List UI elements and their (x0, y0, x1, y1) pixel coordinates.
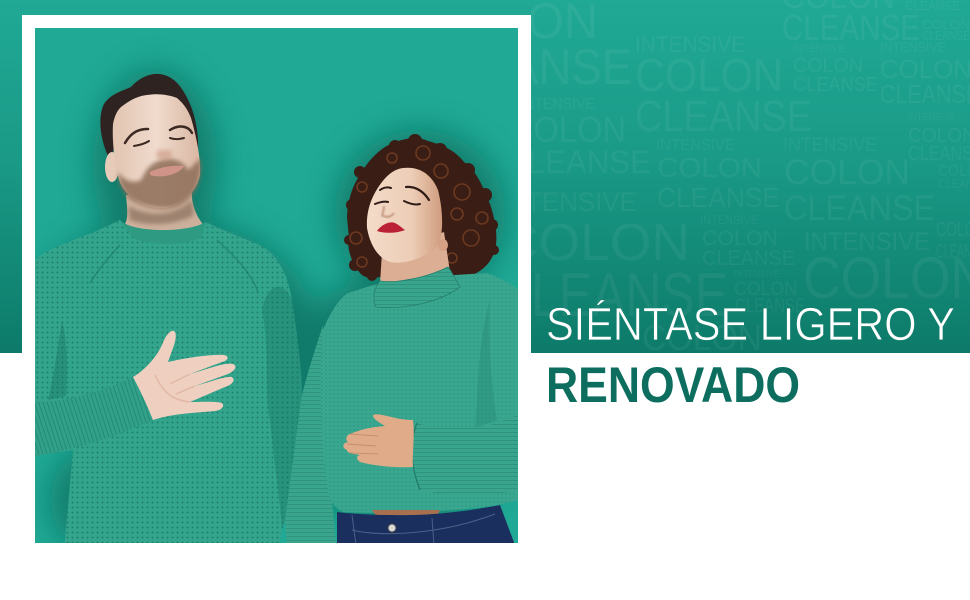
background word pattern: intensive colon cleanse: CLEANSE (420, 39, 632, 95)
woman jeans (337, 505, 515, 545)
woman ear (438, 239, 448, 251)
woman finger lines (347, 434, 378, 454)
man nose shadow (156, 150, 172, 160)
woman hand (343, 414, 414, 467)
man eyes and brows (125, 127, 192, 146)
woman (285, 134, 520, 545)
background word pattern: intensive colon cleanse: COLON (922, 17, 970, 32)
background word pattern: intensive colon cleanse: COLON (635, 49, 783, 101)
woman face (367, 168, 442, 263)
man neck (125, 192, 202, 230)
background word pattern: intensive colon cleanse: INTENSIVE (635, 32, 745, 57)
background word pattern: intensive colon cleanse: COLON (784, 153, 910, 192)
man hand (133, 331, 235, 420)
man beard (118, 158, 201, 209)
background word pattern: intensive colon cleanse: INTENSIVE (520, 96, 595, 113)
woman sleeve cuff (412, 415, 518, 495)
heading: renovado: RENOVADO (546, 357, 800, 413)
woman left sleeve (285, 325, 336, 545)
man (35, 74, 302, 550)
background word pattern: intensive colon cleanse: INTENSIVE (804, 228, 930, 256)
background word pattern: intensive colon cleanse: INTENSIVE (656, 137, 735, 154)
teal gradient background band (0, 0, 970, 353)
background word pattern: intensive colon cleanse: CLEANSE (793, 74, 878, 96)
background word pattern: intensive colon cleanse: CLEANSE (495, 261, 728, 330)
background word pattern: intensive colon cleanse: INTENSIVE (908, 112, 955, 123)
background word pattern: intensive colon cleanse: COLON (702, 227, 778, 250)
background word pattern: intensive colon cleanse: CLEANSE (784, 189, 935, 228)
man ear (105, 152, 119, 182)
background word pattern: intensive colon cleanse: CLEANSE (657, 182, 780, 213)
jeans seams and button (352, 514, 495, 545)
background word pattern: intensive colon cleanse: COLON (657, 152, 762, 183)
woman lips (377, 222, 405, 233)
man sweater body (35, 220, 302, 550)
man sleeve cuff (35, 377, 153, 456)
woman hair curls (350, 146, 488, 267)
man sweater shading (48, 240, 302, 530)
white photo frame (22, 15, 531, 556)
man face (113, 94, 200, 208)
man lips (150, 166, 184, 176)
background word pattern: intensive colon cleanse: CLEANSE (702, 247, 795, 270)
woman midriff (372, 510, 440, 516)
woman hair (344, 134, 499, 281)
background word pattern: intensive colon cleanse: CLEANSE (505, 144, 651, 180)
background word pattern: intensive colon cleanse: COLON (642, 317, 762, 358)
background word pattern: intensive colon cleanse: INTENSIVE (793, 43, 845, 55)
woman nose shadow (382, 206, 394, 217)
background word pattern: intensive colon cleanse: INTENSIVE (783, 135, 877, 156)
background word pattern: intensive colon cleanse: INTENSIVE (500, 187, 637, 217)
woman neck (380, 232, 450, 284)
background word pattern: intensive colon cleanse (531, 0, 970, 350)
woman eyes and brows (375, 187, 429, 204)
background word pattern: intensive colon cleanse: CLEANSE (635, 92, 812, 141)
background word pattern: intensive colon cleanse: CLEANSE (782, 7, 920, 48)
background word pattern: intensive colon cleanse: INTENSIVE (700, 213, 758, 227)
man hand shading (155, 374, 195, 402)
woman sweater body (321, 273, 520, 513)
background word pattern: intensive colon cleanse: INTENSIVE (734, 269, 780, 280)
background word pattern: intensive colon cleanse: COLON (510, 109, 626, 150)
woman sweater shading (475, 300, 497, 428)
man sweater collar (120, 220, 206, 244)
photo: couple in green sweaters (25, 28, 525, 560)
background word pattern: intensive colon cleanse: COLON (880, 54, 970, 84)
soft shadow behind the couple (25, 70, 525, 560)
photo teal backdrop (35, 28, 518, 543)
background word pattern: intensive colon cleanse: INTENSIVE (880, 39, 946, 55)
background word pattern: intensive colon cleanse: COLON (734, 279, 797, 300)
woman turtleneck collar (374, 267, 460, 308)
background word pattern: intensive colon cleanse: COLON (500, 214, 690, 272)
man neck stubble (128, 200, 194, 224)
background word pattern: intensive colon cleanse: CLEANSE (735, 296, 805, 317)
background word pattern: intensive colon cleanse: COLON (793, 55, 863, 77)
man hair (100, 74, 198, 160)
